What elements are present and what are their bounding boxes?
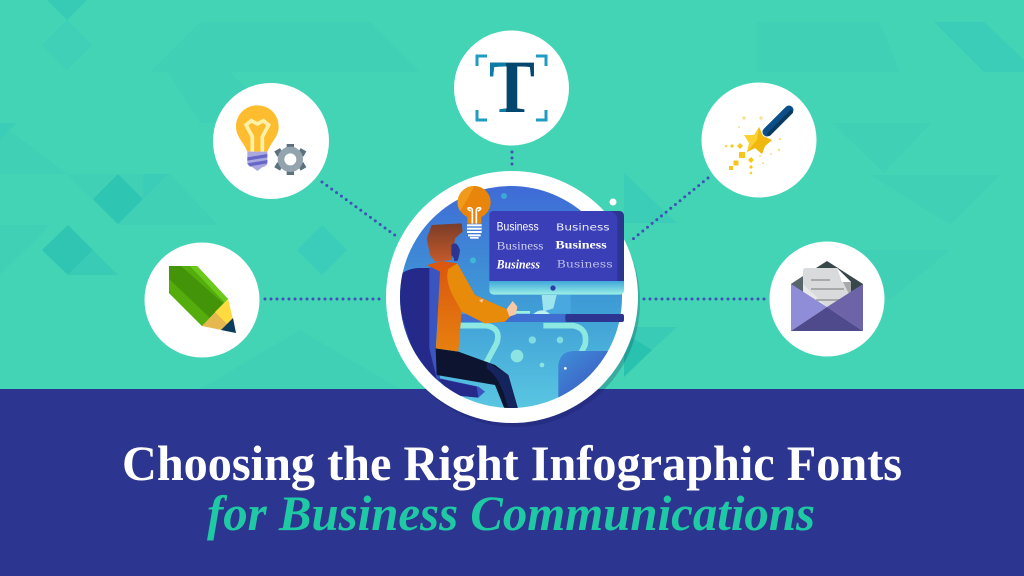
monitor and desk (over ring) [427,186,624,352]
wand [767,110,791,134]
idea bulb [458,186,491,239]
screen font samples: Business [555,237,607,251]
letter T: T [489,46,535,129]
screen font samples [496,221,613,272]
title [122,435,902,541]
icon: gear [274,144,306,175]
envelope front [791,284,827,331]
desk legs [457,326,498,365]
icon: lightbulb [236,105,279,171]
monitor bezel [489,281,624,295]
illustration: person at desk [400,186,622,408]
screen font samples: Business [557,260,613,271]
letter [803,268,851,310]
screen font samples: Business [556,223,610,234]
hand [507,301,517,317]
title line 1: Choosing the Right Infographic Fonts [122,435,902,491]
envelope back flap [791,261,863,300]
dotted connector lines [265,152,766,299]
chair lower edge [401,314,448,388]
chair back [400,268,440,382]
sparkles [724,116,781,174]
keyboard and mouse [515,311,530,314]
corner brackets [477,56,546,120]
icon circle: lightbulb and gear [213,83,329,199]
thumb [479,299,483,303]
screen font samples: Business [497,221,539,234]
person torso and arm [427,223,517,352]
screen font samples: Business [496,258,540,272]
icon circle: magic wand [702,82,816,198]
letter T [490,62,534,112]
circle shadow [390,177,640,427]
chair strip and seat [429,267,485,398]
tablet [558,351,608,398]
pants [436,348,518,410]
background: teal triangle pattern [0,0,1024,389]
screen font samples: Business [497,238,544,252]
hair [427,223,463,262]
central illustration circle [386,171,640,427]
monitor stand [537,295,571,313]
letter T: T [489,46,535,129]
white ring [386,171,638,423]
icon circle: letter T [454,30,569,146]
icon circle: envelope [770,242,884,356]
star [744,127,772,154]
small white dot [610,198,616,206]
title line 2: for Business Communications [207,485,815,541]
monitor screen [489,211,624,281]
icon circle: pencil [144,242,260,358]
headset [451,243,460,261]
bottom banner [0,389,1024,576]
desk top [460,314,567,322]
